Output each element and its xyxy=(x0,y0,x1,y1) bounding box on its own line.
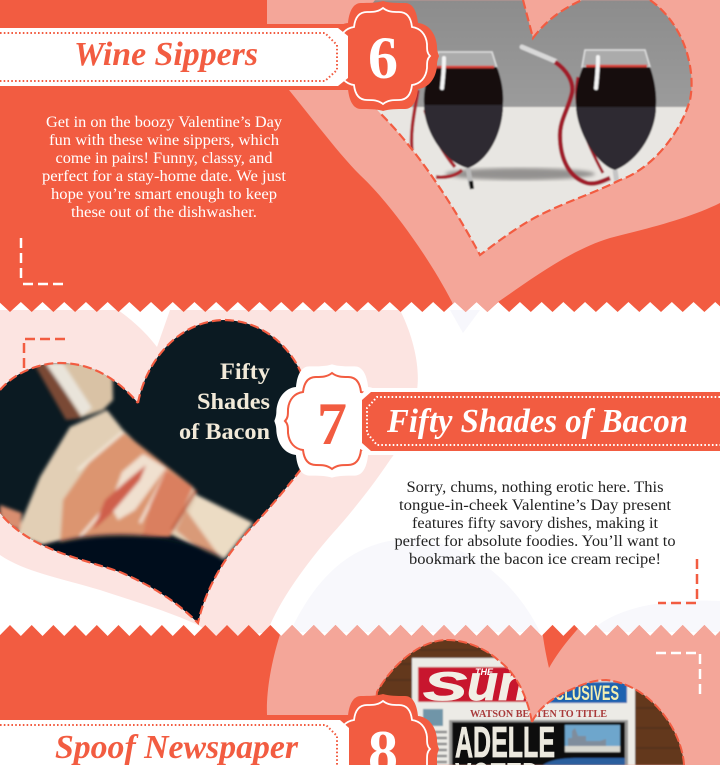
photo outline: heart 8 xyxy=(370,640,684,765)
masthead: S: S xyxy=(423,665,468,709)
body text: section 7: bookmark the bacon ice cream recipe! xyxy=(409,551,661,568)
right glass rim xyxy=(582,50,650,67)
banner: Wine Sippers: Wine Sippers xyxy=(74,36,258,73)
wood grain xyxy=(370,650,690,748)
coral outline strip xyxy=(260,715,350,721)
skyline inset xyxy=(565,725,620,752)
body text: section 6: Get in on the boozy Valentine’s Day xyxy=(46,114,282,131)
blue photo strip xyxy=(543,758,625,765)
badge 7 xyxy=(274,364,390,478)
badge 6 xyxy=(342,1,439,111)
body text: section 7: perfect for absolute foodies. You’ll want to xyxy=(394,533,676,550)
masthead: un: un xyxy=(467,655,529,711)
badge 7: 7 xyxy=(317,391,347,457)
corner dashes: section 7 bottom-right xyxy=(658,559,697,603)
body text: section 6 xyxy=(42,114,287,221)
book title on cover: Shades xyxy=(197,389,270,414)
lower shadow xyxy=(42,531,226,620)
badge 8 xyxy=(327,694,439,765)
banner: Fifty Shades of Bacon: Fifty Shades of Bacon xyxy=(386,403,688,440)
exclusives text: CLUSIVES xyxy=(555,682,619,705)
headline block xyxy=(449,720,628,765)
body text: section 7: Sorry, chums, nothing erotic here. This xyxy=(406,479,664,496)
skyline xyxy=(568,728,606,746)
badge 6: 6 xyxy=(368,25,398,91)
corner dashes: section 8 xyxy=(656,653,700,698)
book title on cover: Fifty xyxy=(220,359,271,384)
section 6 panel xyxy=(0,0,720,335)
left straw xyxy=(412,90,462,177)
body text: section 6: hope you’re smart enough to keep xyxy=(51,186,277,203)
book title on cover xyxy=(180,363,270,439)
photo outline: heart 6 xyxy=(380,0,692,255)
strapline: WATSON BEATEN TO TITLE xyxy=(470,709,607,720)
section 7 background hearts xyxy=(0,310,720,640)
body text: section 6: these out of the dishwasher. xyxy=(71,204,257,221)
book title on cover: of Bacon xyxy=(179,419,270,444)
right glass wine xyxy=(576,67,656,170)
photo: wine sippers xyxy=(373,0,692,254)
pink heart band xyxy=(267,620,720,765)
banner: Fifty Shades of Bacon xyxy=(357,388,720,455)
section 8 panel xyxy=(0,620,720,765)
left glass rim xyxy=(433,52,497,68)
photo outline: heart 7 xyxy=(0,320,302,623)
body text: section 6: perfect for a stay-home date. We just xyxy=(42,168,287,185)
photo: spoof newspaper xyxy=(365,635,690,765)
masthead: THE: THE xyxy=(475,667,494,677)
pink heart band xyxy=(267,0,720,335)
masthead xyxy=(418,667,528,702)
exclusives box xyxy=(548,682,627,703)
body text: section 7: tongue-in-cheek Valentine’s Day present xyxy=(399,497,672,514)
photo: Fifty Shades of Bacon book xyxy=(0,318,305,645)
side column text xyxy=(435,730,448,764)
body text: section 7: features fifty savory dishes, making it xyxy=(412,515,659,532)
body text: section 7 xyxy=(394,479,676,568)
corner dashes: section 7 top-left xyxy=(24,339,65,368)
banner: Spoof Newspaper: Spoof Newspaper xyxy=(55,729,299,765)
coral heart notch xyxy=(542,625,578,668)
banner: Spoof Newspaper xyxy=(0,720,349,765)
banner: Wine Sippers xyxy=(0,28,348,86)
body text: section 6: come in pairs! Funny, classy, and xyxy=(56,150,272,167)
newspaper page xyxy=(412,658,635,765)
left glass wine xyxy=(424,67,503,168)
corner dashes: section 6 xyxy=(21,238,63,284)
table shadow xyxy=(445,168,595,180)
bacon illustration xyxy=(0,362,253,562)
side photo xyxy=(423,709,443,726)
body text: section 6: fun with these wine sippers, which xyxy=(49,132,279,149)
right straw xyxy=(522,47,555,61)
coral outline strip behind banner xyxy=(260,24,350,90)
